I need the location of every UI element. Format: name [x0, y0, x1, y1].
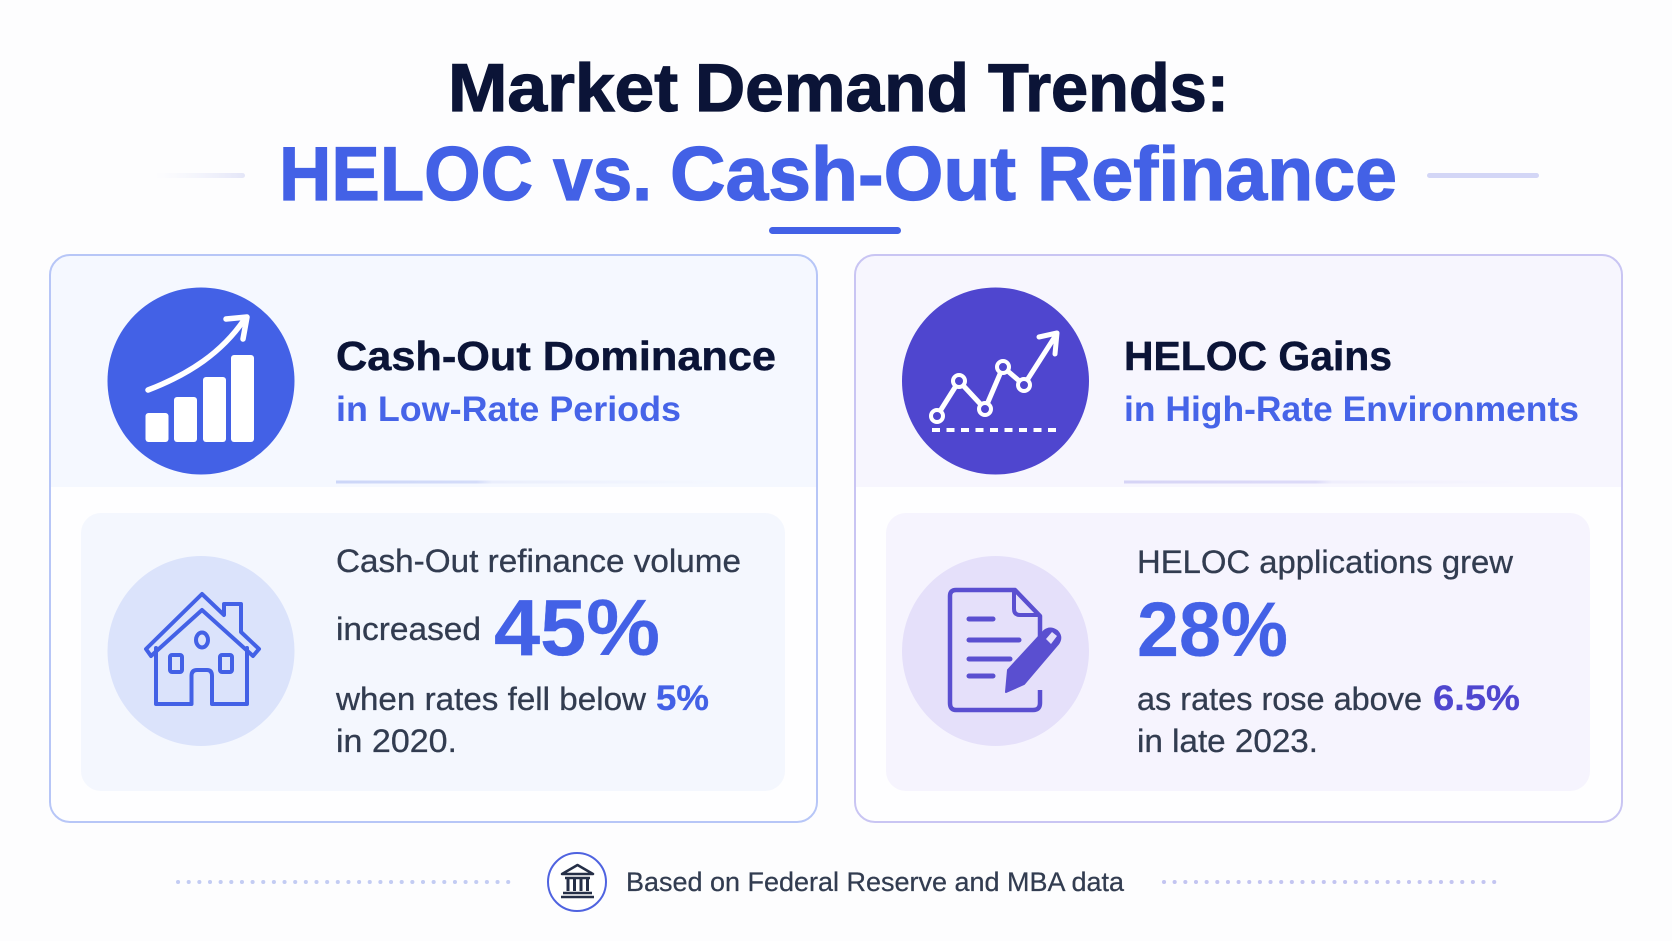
icon: line chart	[902, 288, 1089, 474]
icon: house	[108, 556, 294, 746]
icon: bank	[548, 853, 606, 911]
stat panel: cash-out	[81, 513, 785, 791]
stat text: cash-out volume: increased	[336, 611, 481, 647]
title line 2: Refinance	[1037, 132, 1397, 217]
title line 1: Market	[448, 50, 678, 126]
title line 1: Demand	[695, 50, 969, 126]
panel: cash-out dominance	[50, 255, 817, 822]
title	[155, 50, 1539, 234]
panel: heloc gains	[855, 255, 1622, 822]
stat text: cash-out volume: 5%	[656, 679, 709, 718]
title line 1	[448, 50, 1229, 126]
title line 1: Trends:	[988, 50, 1229, 126]
stat panel: heloc	[886, 513, 1590, 791]
stat text: cash-out volume: in 2020.	[336, 723, 457, 759]
stat text: cash-out volume: 45%	[494, 583, 660, 672]
heading: cash-out dominance: Cash-Out Dominance	[336, 333, 776, 379]
subheading: low-rate periods: in Low-Rate Periods	[336, 390, 681, 429]
stat text: heloc applications: 6.5%	[1433, 679, 1520, 718]
stat text: heloc applications	[1137, 544, 1520, 759]
stat text: heloc applications: in late 2023.	[1137, 723, 1318, 759]
title line 2	[279, 132, 1397, 217]
title line 2: Cash-Out	[670, 132, 1016, 217]
stat text: heloc applications: 28%	[1137, 587, 1288, 673]
heading: heloc gains: HELOC Gains	[1124, 333, 1392, 379]
icon: rising bar chart	[108, 288, 294, 474]
subheading: high-rate environments: in High-Rate Environments	[1124, 390, 1579, 429]
stat text: cash-out volume	[335, 543, 741, 759]
footer: source note	[178, 853, 1495, 911]
stat text: cash-out volume: Cash-Out refinance volume	[336, 543, 741, 579]
title line 2: HELOC	[279, 132, 533, 217]
stat text: cash-out volume: when rates fell below	[335, 681, 647, 717]
icon: document and pencil	[902, 556, 1089, 746]
title line 2: vs.	[553, 132, 652, 217]
source text: Based on Federal Reserve and MBA data	[626, 867, 1125, 897]
stat text: heloc applications: HELOC applications grew	[1137, 544, 1514, 580]
stat text: heloc applications: as rates rose above	[1137, 681, 1422, 717]
